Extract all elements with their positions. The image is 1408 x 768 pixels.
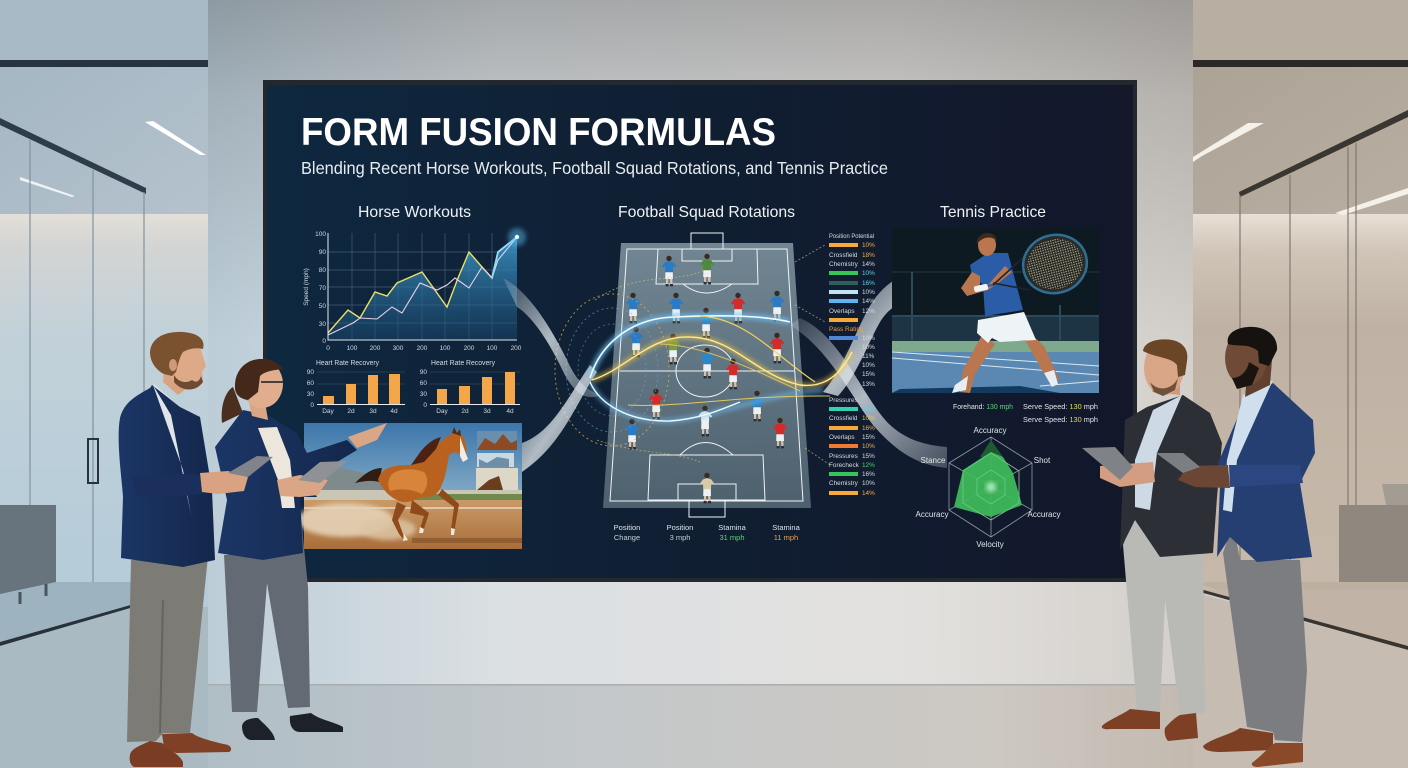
legend: player metrics: 11% xyxy=(862,353,875,360)
legend: player metrics: 15% xyxy=(862,453,875,460)
x axis labels: 100 xyxy=(487,345,498,352)
bar chart: heart rate recovery right: Heart Rate Recovery xyxy=(431,360,495,367)
title: FORM FUSION FORMULAS xyxy=(301,111,776,154)
radar chart: tennis skills: Shot xyxy=(1034,456,1051,465)
y axis labels: 30 xyxy=(319,321,326,328)
thumbnail images xyxy=(476,431,518,490)
legend: player metrics: 10% xyxy=(862,335,875,342)
legend: player metrics: Overlaps xyxy=(829,308,855,315)
glowing gold stream xyxy=(592,337,852,385)
tennis stats: Serve Speed: 130 mph xyxy=(1023,402,1098,411)
tennis stats: Forehand: 130 mph xyxy=(953,402,1013,411)
bar chart: heart rate recovery right: 3d xyxy=(483,408,491,415)
legend: player metrics: 16% xyxy=(862,280,875,287)
radar chart: tennis skills: Accuracy xyxy=(916,510,948,519)
radar chart: tennis skills: Velocity xyxy=(976,540,1004,549)
x axis labels: 100 xyxy=(440,345,451,352)
radar chart: tennis skills: Stance xyxy=(921,456,946,465)
x axis labels xyxy=(326,345,522,352)
icon: tennis player figure xyxy=(952,228,1093,393)
legend: player metrics: 10% xyxy=(862,480,875,487)
legend: player metrics: Crossfield xyxy=(829,252,858,259)
man's hand and tablet in front of woman xyxy=(200,456,273,494)
legend: player metrics: Chemistry xyxy=(829,480,859,487)
dashed orbit rings xyxy=(555,245,830,465)
ribbon: tennis photo to centre xyxy=(823,268,940,396)
legend: player metrics: 15% xyxy=(862,371,875,378)
radar chart: tennis skills xyxy=(916,426,1060,549)
person: man in charcoal blazer, right xyxy=(1082,339,1222,741)
legend: player metrics: Chemistry xyxy=(829,261,859,268)
y axis labels: 80 xyxy=(319,267,326,274)
legend: player metrics: Position Potential xyxy=(829,233,874,240)
bar chart: heart rate recovery left: Heart Rate Recovery xyxy=(316,360,379,367)
bar chart: heart rate recovery left: Day xyxy=(322,408,335,415)
radar chart: tennis skills: Accuracy xyxy=(1028,510,1060,519)
legend: player metrics: 16% xyxy=(862,471,875,478)
pitch stats: 31 mph xyxy=(719,533,745,542)
legend: player metrics: 10% xyxy=(862,415,875,422)
bar chart: heart rate recovery right: 4d xyxy=(506,408,514,415)
legend: player metrics: 14% xyxy=(862,490,875,497)
subtitle: Blending Recent Horse Workouts, Football Squad Rotations, and Tennis Practice xyxy=(301,158,888,178)
background: left glass room xyxy=(0,0,208,768)
legend: player metrics: Pass Rating xyxy=(829,326,864,333)
bar chart: heart rate recovery left: 2d xyxy=(347,408,355,415)
pitch stats: 3 mph xyxy=(670,533,690,542)
legend: player metrics: Overlaps xyxy=(829,434,855,441)
background: central wall and floor xyxy=(208,0,1193,768)
background: right glass room xyxy=(1193,0,1408,768)
legend: player metrics: 14% xyxy=(862,298,875,305)
legend: player metrics: 16% xyxy=(862,406,875,413)
pitch stats: Stamina xyxy=(718,523,747,532)
bar chart: heart rate recovery left: 0 xyxy=(310,402,314,409)
bar chart: heart rate recovery right: 90 xyxy=(420,369,427,376)
radar chart: tennis skills: Accuracy xyxy=(974,426,1006,435)
pitch stats: Stamina xyxy=(772,523,801,532)
bar chart: heart rate recovery left: 60 xyxy=(307,380,314,387)
legend: player metrics: 15% xyxy=(862,434,875,441)
legend: player metrics: 13% xyxy=(862,381,875,388)
wall screen xyxy=(263,80,1137,582)
heading: horse workouts: Horse Workouts xyxy=(358,204,471,221)
tennis stats xyxy=(953,402,1098,424)
pitch surface xyxy=(603,243,811,508)
bar chart: heart rate recovery right: Day xyxy=(436,408,449,415)
tennis stats: Serve Speed: 130 mph xyxy=(1023,415,1098,424)
legend: player metrics: 12% xyxy=(862,462,875,469)
heading: tennis practice: Tennis Practice xyxy=(940,204,1046,221)
football pitch with players xyxy=(603,233,811,517)
legend: player metrics: 10% xyxy=(862,362,875,369)
y axis labels: 50 xyxy=(319,303,326,310)
legend: player metrics: 12% xyxy=(862,308,875,315)
pitch stats: Change xyxy=(614,533,640,542)
bar chart: heart rate recovery right: 0 xyxy=(423,402,427,409)
line chart: horse speed xyxy=(303,228,526,352)
y axis labels: 0 xyxy=(322,338,326,345)
person: man in navy blazer, left xyxy=(119,332,231,767)
pitch lines xyxy=(610,233,803,517)
icon: horse xyxy=(355,427,468,541)
flow ribbons connecting the three sports xyxy=(503,268,947,472)
x axis labels: 200 xyxy=(511,345,522,352)
x axis labels: 100 xyxy=(347,345,358,352)
legend: player metrics: 10% xyxy=(862,270,875,277)
pitch stats: Position xyxy=(667,523,693,532)
legend: player metrics: Pressures xyxy=(829,453,858,460)
bar chart: heart rate recovery left: 3d xyxy=(369,408,377,415)
pitch stats xyxy=(614,523,801,542)
legend: player metrics: 16% xyxy=(862,425,875,432)
person: woman in navy blazer, pointing xyxy=(215,359,387,740)
heading: football squad rotations: Football Squad Rotations xyxy=(618,204,795,221)
bar chart: heart rate recovery right xyxy=(420,360,520,415)
y axis title: Speed (mph) xyxy=(303,268,310,306)
bar chart: heart rate recovery right: 60 xyxy=(420,380,427,387)
bar chart: heart rate recovery right: 2d xyxy=(461,408,469,415)
legend: player metrics: Pressures xyxy=(829,397,858,404)
person: man in blue blazer, far right xyxy=(1156,327,1315,767)
legend: player metrics: 10% xyxy=(862,443,875,450)
x axis labels: 200 xyxy=(464,345,475,352)
y axis labels xyxy=(315,231,326,345)
pitch stats: 11 mph xyxy=(774,533,798,542)
x axis labels: 200 xyxy=(370,345,381,352)
x axis labels: 200 xyxy=(417,345,428,352)
y axis labels: 100 xyxy=(315,231,326,238)
ribbon: centre to radar xyxy=(790,318,947,468)
x axis labels: 300 xyxy=(393,345,404,352)
legend: player metrics: 10% xyxy=(862,242,875,249)
photo: tennis player xyxy=(892,228,1099,393)
y axis labels: 90 xyxy=(319,249,326,256)
bar chart: heart rate recovery left: 30 xyxy=(307,391,314,398)
players xyxy=(625,254,787,503)
bar chart: heart rate recovery right: 30 xyxy=(420,391,427,398)
legend: player metrics: 18% xyxy=(862,252,875,259)
glowing blue stream xyxy=(590,316,790,378)
y axis labels: 70 xyxy=(319,285,326,292)
photo: galloping horse xyxy=(297,423,522,549)
legend: player metrics: Crossfield xyxy=(829,415,858,422)
legend: player metrics: Forecheck xyxy=(829,462,860,469)
pitch stats: Position xyxy=(614,523,640,532)
legend: player metrics: 10% xyxy=(862,289,875,296)
legend: player metrics xyxy=(829,233,875,497)
bar chart: heart rate recovery left: 4d xyxy=(390,408,398,415)
bar chart: heart rate recovery left: 90 xyxy=(307,369,314,376)
ribbon: horse photo to centre xyxy=(522,365,597,472)
x axis labels: 0 xyxy=(326,345,330,352)
bar chart: heart rate recovery left xyxy=(307,360,405,415)
ribbon: horse chart to centre xyxy=(503,278,600,397)
legend: player metrics: 10% xyxy=(862,344,875,351)
legend: player metrics: 14% xyxy=(862,261,875,268)
